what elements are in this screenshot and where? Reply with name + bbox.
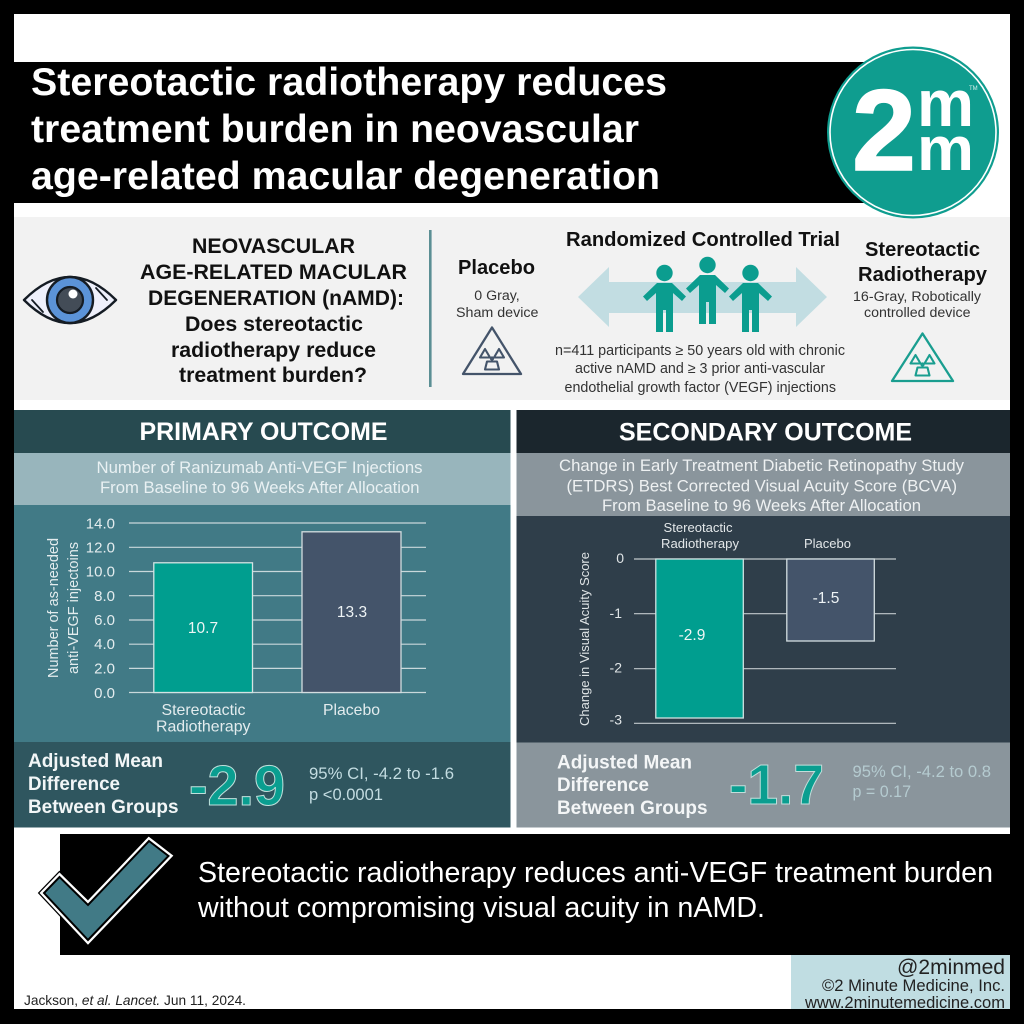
bar chart: anti-VEGF injections: 8.0 [94,588,115,605]
subheading: secondary measure: Change in Early Treatment Diabetic Retinopathy Study [559,456,965,475]
bar: placebo -1.5: -1.5 [813,590,839,607]
bar: placebo 13.3 [302,532,401,692]
stat: secondary adjusted mean difference: -1.7 [729,753,824,817]
icon: radiotherapy radiation triangle [892,334,953,381]
trial design: endothelial growth factor (VEGF) injections [564,380,836,396]
bar chart: anti-VEGF injections: 10.0 [86,564,115,580]
placebo arm [456,257,539,374]
trial design: Randomized Controlled Trial [566,229,840,251]
conclusion banner: Stereotactic radiotherapy reduces anti-VEGF treatment burden [198,857,993,889]
bar: placebo -1.5 [787,559,874,641]
title banner: Stereotactic radiotherapy reduces [31,60,667,104]
stat: secondary adjusted mean difference: Between Groups [557,798,708,819]
icon: check mark [44,841,168,940]
heading: primary outcome [14,410,510,453]
bar: stereotactic radiotherapy 10.7: 10.7 [188,620,218,637]
question text: treatment burden? [179,364,367,387]
bar chart: anti-VEGF injections: Radiotherapy [156,718,251,736]
panel: study overview [14,217,1010,400]
heading: secondary outcome: SECONDARY OUTCOME [619,420,912,446]
logo: 2 Minute Medicine: TM [969,86,978,92]
logo: 2 Minute Medicine: m [917,66,974,140]
bar chart: anti-VEGF injections: Number of as-needed [46,538,62,678]
bar: stereotactic radiotherapy -2.9 [656,559,743,718]
bar chart: visual acuity change: -2 [610,660,622,676]
stat: primary adjusted mean difference [14,742,510,828]
footer credit box: @2minmed [897,956,1005,979]
placebo arm: Sham device [456,305,539,321]
bar chart: anti-VEGF injections: 0.0 [94,685,115,702]
stat: primary adjusted mean difference: Adjusted Mean [28,751,163,772]
bar chart: anti-VEGF injections: anti-VEGF injectoins [66,542,82,674]
stat: secondary adjusted mean difference: 95% CI, -4.2 to 0.8 [852,762,991,781]
stat: secondary adjusted mean difference: Difference [557,775,649,796]
icon: participants [643,257,772,332]
bar chart: visual acuity change: Placebo [804,536,851,551]
subheading: primary measure: Number of Ranizumab Anti-VEGF Injections [96,458,422,477]
stat: primary adjusted mean difference: p <0.0001 [309,785,383,804]
subheading: secondary measure: From Baseline to 96 Weeks After Allocation [602,496,921,515]
radiotherapy arm: Radiotherapy [858,264,988,286]
bar chart: anti-VEGF injections: 2.0 [94,660,115,678]
trial design: n=411 participants ≥ 50 years old with chronic [555,343,845,359]
footer credit box: www.2minutemedicine.com [804,994,1005,1012]
stat: primary adjusted mean difference: -2.9 [189,754,285,818]
question text: Does stereotactic [185,313,363,336]
bar chart: anti-VEGF injections: 6.0 [94,612,115,629]
bar chart: visual acuity change: Stereotactic [664,520,733,535]
placebo arm: Placebo [458,257,535,279]
stat: primary adjusted mean difference: Difference [28,774,120,795]
trial design [555,229,845,396]
logo: 2 Minute Medicine: 2 [852,67,916,195]
bar chart: anti-VEGF injections: Stereotactic [162,702,246,719]
bar chart: anti-VEGF injections: 4.0 [94,636,115,653]
radiotherapy arm [853,239,988,381]
icon: placebo radiation triangle [463,328,521,374]
radiotherapy arm: 16-Gray, Robotically [853,289,982,305]
bar chart: visual acuity change: 0 [616,550,624,566]
bar chart: visual acuity change: Change in Visual Acuity Score [577,552,592,726]
radiotherapy arm: controlled device [864,305,971,321]
bar chart: anti-VEGF injections: Placebo [323,702,380,719]
title banner: treatment burden in neovascular [31,107,639,151]
subheading: primary measure [14,453,510,505]
stat: primary adjusted mean difference: Between Groups [28,797,178,818]
heading: primary outcome: PRIMARY OUTCOME [140,419,388,446]
footer credit box: ©2 Minute Medicine, Inc. [822,977,1005,995]
trial design: active nAMD and ≥ 3 prior anti-vascular [575,361,825,377]
question text: radiotherapy reduce [171,339,376,362]
icon: eye [24,277,116,323]
placebo arm: 0 Gray, [474,288,520,304]
citation: Jackson, et al. Lancet. Jun 11, 2024. [24,993,246,1008]
subheading: secondary measure: (ETDRS) Best Corrected Visual Acuity Score (BCVA) [566,476,957,496]
conclusion banner: without compromising visual acuity in nAMD. [197,892,765,924]
logo: 2 Minute Medicine [827,46,999,218]
bar chart: anti-VEGF injections: 14.0 [86,516,115,532]
bar chart: visual acuity change [516,516,1010,742]
footer credit box [791,955,1010,1012]
question text: NEOVASCULAR [192,235,355,258]
question text: DEGENERATION (nAMD): [148,287,404,310]
radiotherapy arm: Stereotactic [865,239,980,261]
panel: secondary outcome [516,410,1010,828]
stat: secondary adjusted mean difference: Adjusted Mean [557,752,692,774]
bar chart: anti-VEGF injections: 12.0 [86,540,115,556]
bar chart: visual acuity change: Radiotherapy [661,536,739,551]
title banner: age-related macular degeneration [31,154,660,198]
bar: placebo 13.3: 13.3 [337,604,367,621]
bar: stereotactic radiotherapy -2.9: -2.9 [679,627,705,644]
question text [140,235,407,387]
question text: AGE-RELATED MACULAR [140,261,407,284]
heading: secondary outcome [516,410,1010,453]
bar: stereotactic radiotherapy 10.7 [154,563,252,692]
stat: secondary adjusted mean difference [516,742,1010,828]
bar chart: visual acuity change: -1 [610,605,622,621]
title banner [14,60,874,203]
logo: 2 Minute Medicine: m [917,115,974,184]
panel: primary outcome [14,410,510,828]
bar chart: anti-VEGF injections [14,505,510,742]
subheading: secondary measure [516,453,1010,516]
bar chart: visual acuity change: -3 [610,712,622,728]
arrow: double-headed allocation [578,267,827,327]
subheading: primary measure: From Baseline to 96 Weeks After Allocation [100,478,420,497]
conclusion banner [60,834,1010,955]
stat: secondary adjusted mean difference: p = 0.17 [852,782,911,801]
stat: primary adjusted mean difference: 95% CI, -4.2 to -1.6 [309,764,454,783]
